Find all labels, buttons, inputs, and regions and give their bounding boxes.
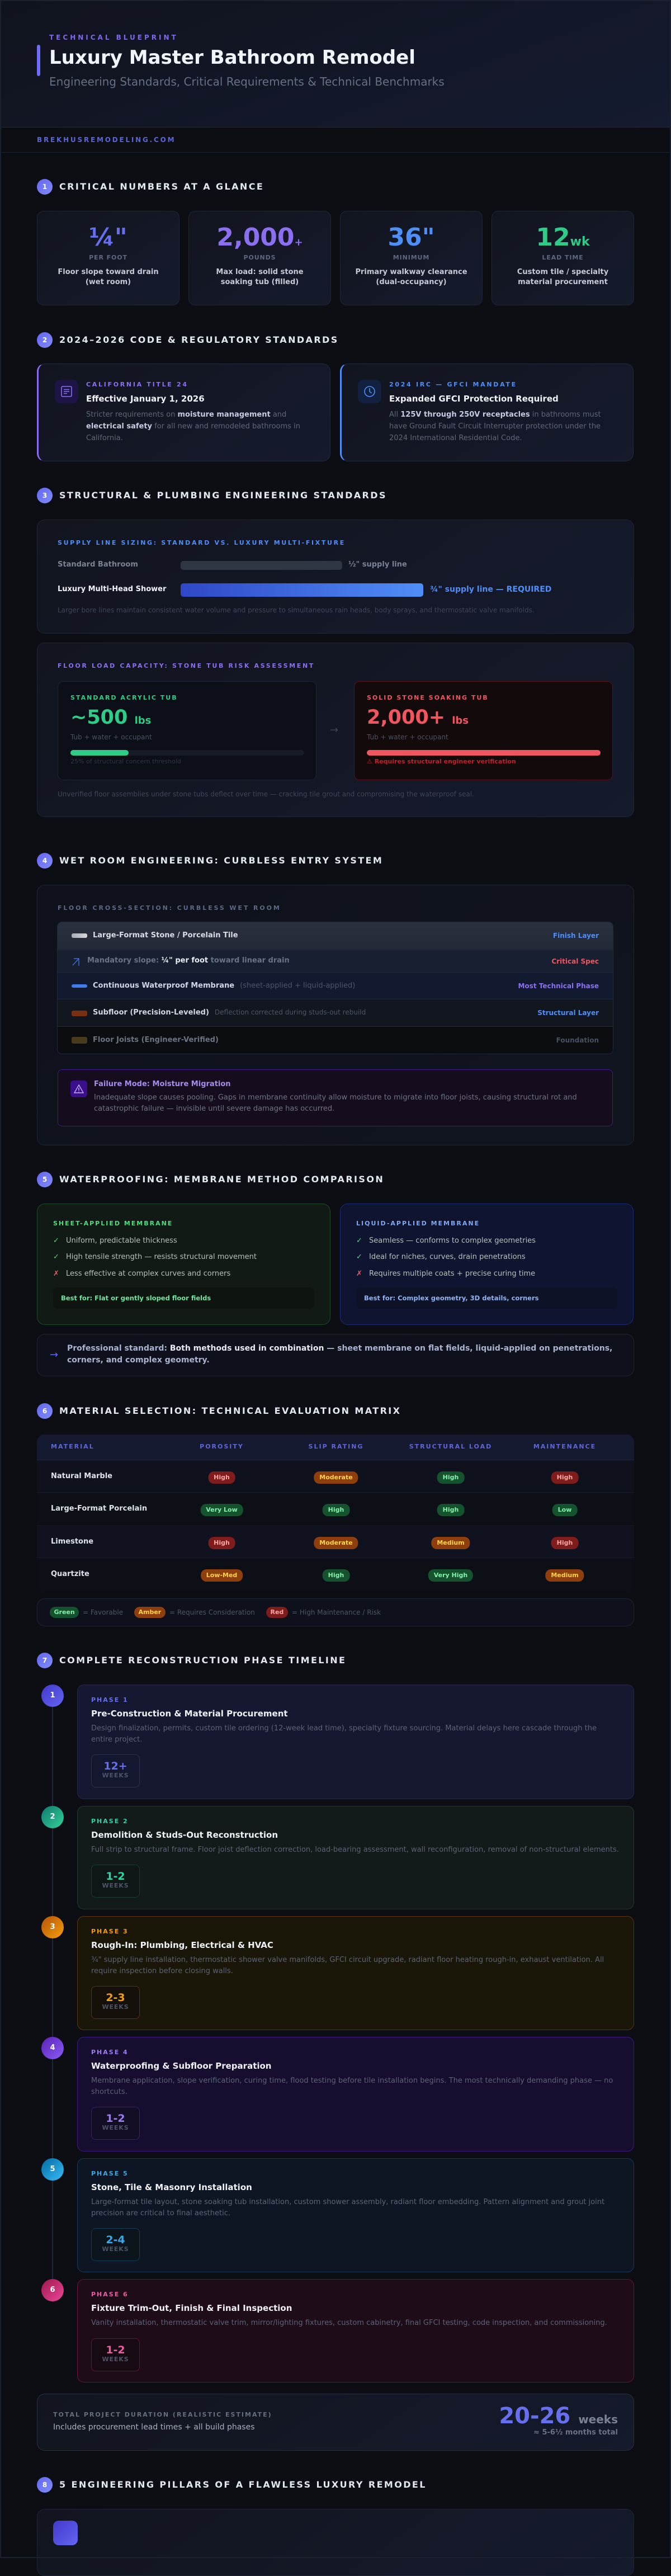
phase node 6 bbox=[41, 2279, 64, 2301]
phase description bbox=[91, 1724, 597, 1744]
phase description: Full strip to structural frame. Floor joist deflection correction, load-bearing assessment, wall reconfiguration, removal of non-structural elements. bbox=[91, 1846, 619, 1854]
row: natural marble: High bbox=[214, 1474, 230, 1481]
callout: professional standard bbox=[37, 1334, 634, 1376]
phase description: Membrane application, slope verification, curing time, flood testing before tile installation begins. The most technically demanding phase — no bbox=[91, 2077, 613, 2085]
row: natural marble: High bbox=[557, 1474, 573, 1481]
layer tag: Finish Layer bbox=[553, 932, 599, 940]
bar label: standard: ½" supply line bbox=[348, 560, 407, 569]
card body bbox=[86, 411, 300, 442]
pro item: Uniform, predictable thickness bbox=[66, 1237, 177, 1245]
icon: clock bbox=[358, 380, 381, 403]
legend bbox=[37, 1598, 634, 1626]
eyebrow: TECHNICAL BLUEPRINT bbox=[49, 34, 178, 41]
duration badge bbox=[91, 1754, 140, 1787]
stat card: tub load: POUNDS bbox=[243, 254, 276, 261]
row label: standard: Standard Bathroom bbox=[58, 560, 138, 569]
phase title: Rough-In: Plumbing, Electrical & HVAC bbox=[91, 1940, 273, 1950]
tub label: SOLID STONE SOAKING TUB bbox=[367, 694, 489, 701]
pillar icon tile bbox=[53, 2521, 78, 2545]
phase card 2 bbox=[77, 1806, 634, 1909]
row: natural marble: Moderate bbox=[319, 1474, 353, 1481]
phase description bbox=[91, 2077, 613, 2096]
stat card: floor slope: (wet room) bbox=[86, 278, 131, 286]
stat card: floor slope: Floor slope toward drain bbox=[58, 268, 159, 276]
layer tag: Critical Spec bbox=[551, 957, 599, 965]
duration badge: 12+ bbox=[103, 1760, 127, 1772]
duration badge: 1-2 bbox=[106, 2344, 125, 2356]
card title: Effective January 1, 2026 bbox=[86, 394, 205, 404]
layer name: Floor Joists (Engineer-Verified) bbox=[93, 1036, 219, 1044]
duration badge: 2-3 bbox=[106, 1992, 125, 2004]
best-for box bbox=[53, 1287, 314, 1309]
duration badge: WEEKS bbox=[102, 2003, 129, 2011]
pro item: Seamless — conforms to complex geometries bbox=[369, 1237, 536, 1245]
section heading 6: 6 bbox=[42, 1407, 47, 1415]
callout text bbox=[94, 1093, 577, 1113]
timeline connector line bbox=[52, 1707, 53, 2289]
layer stack bbox=[58, 922, 613, 1054]
phase title: Waterproofing & Subfloor Preparation bbox=[91, 2061, 272, 2071]
card heading: LIQUID-APPLIED MEMBRANE bbox=[356, 1220, 480, 1227]
phase node 5 bbox=[41, 2158, 64, 2181]
code card: IRC GFCI bbox=[340, 364, 634, 461]
panel eyebrow: FLOOR LOAD CAPACITY: STONE TUB RISK ASSESSMENT bbox=[58, 662, 315, 669]
card body: have Ground Fault Circuit Interrupter protection under the bbox=[389, 422, 601, 431]
phase title: Stone, Tile & Masonry Installation bbox=[91, 2182, 252, 2192]
panel: floor load capacity bbox=[37, 643, 634, 817]
eyebrow: CALIFORNIA TITLE 24 bbox=[86, 381, 188, 388]
layer: membrane bbox=[58, 972, 613, 999]
pro item: ✓ bbox=[53, 1237, 59, 1245]
phase node 2 bbox=[41, 1806, 64, 1828]
callout text bbox=[67, 1344, 612, 1365]
stat card: walkway clearance: MINIMUM bbox=[393, 254, 429, 261]
layer name: Large-Format Stone / Porcelain Tile bbox=[93, 931, 238, 940]
callout text: Professional standard: Both methods used in combination — sheet membrane on flat fields, liquid-applied on penetrations, bbox=[67, 1344, 612, 1353]
con item: ✗ bbox=[356, 1270, 362, 1278]
row: quartzite: Very High bbox=[434, 1572, 467, 1579]
phase node 4 bbox=[41, 2037, 64, 2059]
duration badge bbox=[91, 1865, 140, 1898]
bar: standard half inch bbox=[181, 561, 342, 570]
con item: Less effective at complex curves and corners bbox=[66, 1270, 230, 1278]
duration badge: 1-2 bbox=[106, 1870, 125, 1883]
row: large-format porcelain: Low bbox=[558, 1506, 571, 1513]
phase node 3 bbox=[41, 1916, 64, 1938]
row: limestone: Medium bbox=[437, 1539, 465, 1546]
stat card: floor slope: PER FOOT bbox=[89, 254, 127, 261]
subtitle: Engineering Standards, Critical Requirements & Technical Benchmarks bbox=[49, 75, 445, 88]
layer: joists bbox=[58, 1026, 613, 1054]
stat card: walkway clearance: Primary walkway clearance bbox=[355, 268, 467, 276]
comparison card: acrylic tub bbox=[58, 681, 316, 780]
section heading 4: WET ROOM ENGINEERING: CURBLESS ENTRY SYSTEM bbox=[59, 855, 383, 866]
phase label: PHASE 2 bbox=[91, 1818, 129, 1825]
layer: tile bbox=[58, 922, 613, 950]
stat card: lead time: material procurement bbox=[518, 278, 608, 286]
bar label: luxury: ¾" supply line — REQUIRED bbox=[430, 585, 551, 594]
website link: BREKHUSREMODELING.COM bbox=[37, 136, 176, 144]
table header: MATERIAL bbox=[51, 1443, 94, 1450]
phase card 5 bbox=[77, 2158, 634, 2272]
phase description bbox=[91, 2198, 604, 2218]
tub weight: ~500 lbs bbox=[70, 706, 151, 729]
duration note: Includes procurement lead times + all build phases bbox=[53, 2423, 255, 2432]
layer tag: Structural Layer bbox=[537, 1009, 599, 1017]
load bar bbox=[367, 750, 601, 756]
warning caption: ⚠ Requires structural engineer verification bbox=[367, 758, 516, 765]
legend item: amber: Amber bbox=[139, 1608, 161, 1616]
callout: failure mode bbox=[58, 1069, 613, 1126]
panel: wet room cross-section bbox=[37, 885, 634, 1145]
pro item: High tensile strength — resists structural movement bbox=[66, 1253, 257, 1261]
layer tag: Most Technical Phase bbox=[518, 982, 599, 990]
section heading 1: 1 bbox=[42, 183, 47, 191]
phase label: PHASE 4 bbox=[91, 2049, 129, 2056]
section heading 2: 2024–2026 CODE & REGULATORY STANDARDS bbox=[59, 334, 339, 345]
legend item: red bbox=[266, 1607, 288, 1618]
section heading 3: STRUCTURAL & PLUMBING ENGINEERING STANDARDS bbox=[59, 490, 387, 501]
phase card 1 bbox=[77, 1685, 634, 1799]
duration badge bbox=[91, 2338, 140, 2371]
section heading 4: 4 bbox=[42, 857, 47, 865]
layer: slope bbox=[58, 950, 613, 972]
stat card: tub load: soaking tub (filled) bbox=[221, 278, 299, 286]
card body: 2024 International Residential Code. bbox=[389, 434, 522, 442]
legend: = High Maintenance / Risk bbox=[292, 1608, 381, 1616]
icon: document bbox=[55, 380, 78, 403]
title: Luxury Master Bathroom Remodel bbox=[49, 46, 415, 69]
tub sub-label: Tub + water + occupant bbox=[367, 733, 448, 741]
section heading 1: CRITICAL NUMBERS AT A GLANCE bbox=[59, 181, 264, 192]
icon: slope arrow bbox=[73, 958, 79, 966]
swatch bbox=[72, 933, 87, 938]
con item: ✗ bbox=[53, 1270, 59, 1278]
table header bbox=[37, 1435, 634, 1460]
section heading 5: 5 bbox=[42, 1176, 47, 1183]
legend item: green bbox=[50, 1607, 79, 1618]
legend: = Favorable bbox=[83, 1608, 123, 1616]
duration badge: WEEKS bbox=[102, 2124, 129, 2131]
panel eyebrow: SUPPLY LINE SIZING: STANDARD VS. LUXURY MULTI-FIXTURE bbox=[58, 539, 346, 546]
section heading 1 bbox=[37, 179, 264, 195]
layer name: Continuous Waterproof Membrane (sheet-applied + liquid-applied) bbox=[93, 982, 355, 990]
stat card: lead time bbox=[492, 211, 634, 305]
section heading 8 bbox=[37, 2477, 427, 2493]
stat card: lead time: 12wk bbox=[536, 223, 590, 252]
layer: subfloor bbox=[58, 999, 613, 1026]
phase label: PHASE 6 bbox=[91, 2291, 129, 2298]
best-for box bbox=[356, 1287, 617, 1309]
row: large-format porcelain: Very Low bbox=[206, 1506, 238, 1513]
load bar bbox=[70, 750, 304, 756]
bar caption: 25% of structural concern threshold bbox=[70, 758, 181, 765]
duration badge bbox=[91, 2107, 140, 2140]
duration badge: 2-4 bbox=[106, 2234, 125, 2246]
phase node 5: 5 bbox=[50, 2165, 55, 2173]
section heading 2 bbox=[37, 332, 339, 348]
card heading: SHEET-APPLIED MEMBRANE bbox=[53, 1220, 173, 1227]
slope text: Mandatory slope: ¼" per foot toward linear drain bbox=[87, 956, 290, 965]
row: quartzite: Low-Med bbox=[206, 1572, 237, 1579]
panel eyebrow: FLOOR CROSS-SECTION: CURBLESS WET ROOM bbox=[58, 904, 281, 912]
stat card: tub load bbox=[188, 211, 331, 305]
legend item: green: Green bbox=[54, 1608, 75, 1616]
row: natural marble: High bbox=[443, 1474, 459, 1481]
panel: supply line sizing bbox=[37, 520, 634, 634]
swatch bbox=[72, 1037, 87, 1044]
section heading 4 bbox=[37, 853, 383, 869]
row: limestone: Limestone bbox=[51, 1537, 93, 1546]
stat card: lead time: Custom tile / specialty bbox=[517, 268, 608, 276]
pro item: Ideal for niches, curves, drain penetrations bbox=[369, 1253, 526, 1261]
callout text: corners, and complex geometry. bbox=[67, 1356, 210, 1365]
pro item: ✓ bbox=[356, 1253, 362, 1261]
phase description: require inspection before closing walls. bbox=[91, 1967, 233, 1975]
icon: warning bbox=[70, 1081, 87, 1097]
bar: luxury three-quarter inch bbox=[181, 583, 423, 597]
callout text: catastrophic failure — invisible until severe damage has occurred. bbox=[94, 1105, 334, 1113]
stat card: floor slope: ¼" bbox=[89, 223, 127, 252]
row: limestone: Moderate bbox=[319, 1539, 353, 1546]
header bbox=[1, 1, 670, 128]
eyebrow: 2024 IRC — GFCI MANDATE bbox=[389, 381, 517, 388]
table: material matrix bbox=[37, 1435, 634, 1592]
table header: MAINTENANCE bbox=[533, 1443, 596, 1450]
section heading 6 bbox=[37, 1403, 401, 1419]
phase label: PHASE 1 bbox=[91, 1696, 129, 1704]
stat card: walkway clearance: (dual-occupancy) bbox=[376, 278, 447, 286]
legend item: amber bbox=[134, 1607, 166, 1618]
phase label: PHASE 3 bbox=[91, 1928, 129, 1935]
duration badge: WEEKS bbox=[102, 1772, 129, 1779]
section heading 6: MATERIAL SELECTION: TECHNICAL EVALUATION MATRIX bbox=[59, 1405, 401, 1416]
stat card: walkway clearance: 36" bbox=[388, 223, 435, 252]
phase description: precision are critical to final aesthetic. bbox=[91, 2209, 230, 2218]
card body: Stricter requirements on moisture management and bbox=[86, 411, 286, 419]
pro item: ✓ bbox=[53, 1253, 59, 1261]
card body: California. bbox=[86, 434, 123, 442]
section heading 8: 5 ENGINEERING PILLARS OF A FLAWLESS LUXURY REMODEL bbox=[59, 2479, 427, 2490]
table header: STRUCTURAL LOAD bbox=[409, 1443, 492, 1450]
card body: electrical safety for all new and remodeled bathrooms in bbox=[86, 422, 300, 431]
phase node 4: 4 bbox=[50, 2044, 55, 2052]
duration badge: WEEKS bbox=[102, 1882, 129, 1889]
header accent bar bbox=[37, 45, 40, 76]
row: large-format porcelain: High bbox=[443, 1506, 459, 1513]
code card: California Title 24 bbox=[37, 364, 330, 461]
stat card: walkway clearance bbox=[340, 211, 483, 305]
card title: Expanded GFCI Protection Required bbox=[389, 394, 559, 404]
best-for box: Best for: Complex geometry, 3D details, corners bbox=[364, 1294, 539, 1302]
stat card: floor slope bbox=[37, 211, 179, 305]
pro item: ✓ bbox=[356, 1237, 362, 1245]
row: limestone: High bbox=[214, 1539, 230, 1546]
section heading 5: WATERPROOFING: MEMBRANE METHOD COMPARISON bbox=[59, 1174, 384, 1185]
phase card 4 bbox=[77, 2037, 634, 2152]
row label: luxury: Luxury Multi-Head Shower bbox=[58, 585, 166, 593]
panel note: Larger bore lines maintain consistent water volume and pressure to simultaneous rain heads, body sprays, and thermostatic valve manifolds. bbox=[58, 606, 535, 614]
arrow: → bbox=[50, 1349, 58, 1361]
section heading 5 bbox=[37, 1172, 384, 1187]
phase title: Pre-Construction & Material Procurement bbox=[91, 1709, 288, 1719]
phase description: entire project. bbox=[91, 1735, 142, 1744]
callout title: Failure Mode: Moisture Migration bbox=[94, 1080, 231, 1088]
section heading 3 bbox=[37, 488, 387, 503]
callout text: Inadequate slope causes pooling. Gaps in membrane continuity allow moisture to migrate into floor joists, causing structural rot and bbox=[94, 1093, 577, 1102]
phase title: Fixture Trim-Out, Finish & Final Inspection bbox=[91, 2303, 292, 2313]
phase label: PHASE 5 bbox=[91, 2170, 129, 2177]
panel: pillars (cropped) bbox=[37, 2509, 634, 2576]
duration badge: WEEKS bbox=[102, 2245, 129, 2253]
phase card 3 bbox=[77, 1916, 634, 2030]
website band bbox=[1, 128, 670, 153]
phase node 1 bbox=[41, 1685, 64, 1707]
section heading 7: 7 bbox=[42, 1657, 47, 1664]
best-for box: Best for: Flat or gently sloped floor fields bbox=[61, 1294, 211, 1302]
phase node 3: 3 bbox=[50, 1923, 55, 1931]
total duration panel bbox=[37, 2394, 634, 2451]
row: quartzite: High bbox=[328, 1572, 344, 1579]
card body bbox=[389, 411, 601, 442]
phase node 2: 2 bbox=[50, 1813, 55, 1821]
duration badge: 1-2 bbox=[106, 2112, 125, 2125]
phase card 6 bbox=[77, 2279, 634, 2382]
phase title: Demolition & Studs-Out Reconstruction bbox=[91, 1830, 278, 1840]
row: natural marble: Natural Marble bbox=[51, 1472, 112, 1480]
phase description: shortcuts. bbox=[91, 2088, 127, 2096]
table header: POROSITY bbox=[200, 1443, 244, 1450]
swatch bbox=[72, 1011, 87, 1016]
row: natural marble bbox=[37, 1460, 634, 1493]
section heading 8: 8 bbox=[42, 2481, 47, 2489]
duration badge: WEEKS bbox=[102, 2356, 129, 2363]
duration label: TOTAL PROJECT DURATION (REALISTIC ESTIMATE) bbox=[53, 2411, 272, 2418]
phase node 6: 6 bbox=[50, 2286, 55, 2294]
row: large-format porcelain bbox=[37, 1493, 634, 1526]
legend: = Requires Consideration bbox=[169, 1608, 255, 1616]
row: large-format porcelain: Large-Format Porcelain bbox=[51, 1504, 147, 1513]
phase description: ¾" supply line installation, thermostatic shower valve manifolds, GFCI circuit upgrade, radiant floor heating rough-in, exhaust ventilation. All bbox=[91, 1956, 604, 1964]
duration badge bbox=[91, 2228, 140, 2261]
section heading 2: 2 bbox=[42, 336, 47, 344]
duration months: ≈ 5-6½ months total bbox=[533, 2428, 618, 2437]
row: quartzite: Quartzite bbox=[51, 1570, 89, 1578]
tub label: STANDARD ACRYLIC TUB bbox=[70, 694, 178, 701]
layer tag: Foundation bbox=[556, 1036, 599, 1044]
phase description: Large-format tile layout, stone soaking tub installation, custom shower assembly, radiant floor embedding. Pattern alignment and grout joint bbox=[91, 2198, 604, 2206]
arrow: → bbox=[330, 724, 338, 736]
stat card: tub load: Max load: solid stone bbox=[216, 268, 304, 276]
stat card: lead time: LEAD TIME bbox=[542, 254, 584, 261]
card body: All 125V through 250V receptacles in bathrooms must bbox=[389, 411, 601, 419]
row: quartzite: Medium bbox=[551, 1572, 579, 1579]
row: quartzite bbox=[37, 1558, 634, 1592]
stat card: tub load: 2,000+ bbox=[216, 223, 303, 252]
phase description bbox=[91, 1956, 604, 1975]
comparison card: sheet membrane bbox=[37, 1204, 330, 1325]
row: limestone: High bbox=[557, 1539, 573, 1546]
con item: Requires multiple coats + precise curing time bbox=[369, 1270, 535, 1278]
duration badge bbox=[91, 1986, 140, 2019]
section heading 7: COMPLETE RECONSTRUCTION PHASE TIMELINE bbox=[59, 1655, 346, 1666]
row: limestone bbox=[37, 1526, 634, 1558]
phase description: Design finalization, permits, custom tile ordering (12-week lead time), specialty fixture sourcing. Material delays here cascade through the bbox=[91, 1724, 597, 1733]
phase node 1: 1 bbox=[50, 1691, 55, 1700]
row: large-format porcelain: High bbox=[328, 1506, 344, 1513]
swatch bbox=[72, 984, 87, 988]
phase description: Vanity installation, thermostatic valve trim, mirror/lighting fixtures, custom cabinetry, final GFCI testing, code inspection, and commissioning. bbox=[91, 2319, 607, 2327]
section heading 3: 3 bbox=[42, 492, 47, 499]
panel note: Unverified floor assemblies under stone tubs deflect over time — cracking tile grout and compromising the waterproof seal. bbox=[58, 790, 474, 798]
tub weight: 2,000+ lbs bbox=[367, 706, 469, 729]
table header: SLIP RATING bbox=[309, 1443, 363, 1450]
comparison card: liquid membrane bbox=[340, 1204, 634, 1325]
duration value: 20-26 weeks bbox=[499, 2403, 618, 2429]
layer name: Subfloor (Precision-Leveled) Deflection corrected during studs-out rebuild bbox=[93, 1008, 366, 1017]
section heading 7 bbox=[37, 1653, 346, 1668]
legend item: red: Red bbox=[271, 1608, 283, 1616]
tub sub-label: Tub + water + occupant bbox=[70, 733, 152, 741]
comparison card: stone tub bbox=[354, 681, 613, 780]
